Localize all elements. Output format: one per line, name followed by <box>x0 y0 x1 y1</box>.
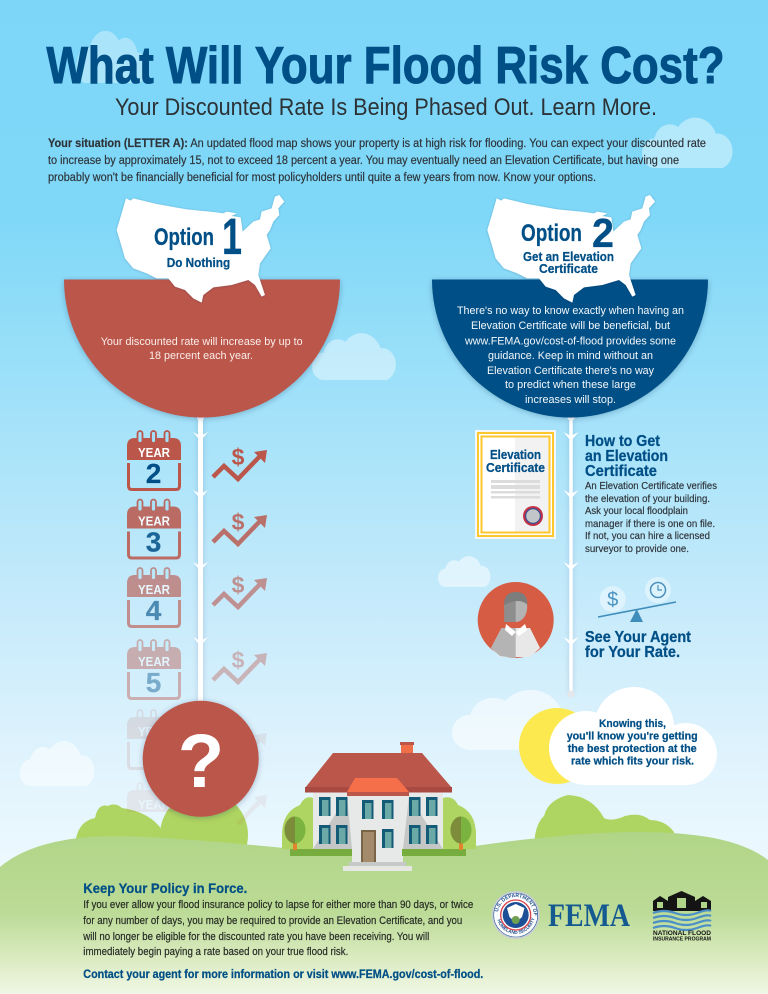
semicircle option 1 <box>64 280 340 418</box>
option 2 label: Certificate <box>539 261 598 276</box>
situation text block: to increase by approximately 15, not to exceed 18 percent a year. You may eventually need an Elevation Certificate, but having one <box>48 155 679 167</box>
year 2 calendar: YEAR <box>138 445 171 460</box>
logo: DHS seal <box>492 891 540 939</box>
callout cloud: Knowing this, <box>599 718 666 730</box>
footer heading: Keep Your Policy in Force. <box>83 880 247 896</box>
cost increase icon year 4 <box>213 572 267 607</box>
situation text block <box>48 138 706 184</box>
how to get text: the elevation of your building. <box>585 493 710 505</box>
how to get text: If not, you can hire a licensed <box>585 530 710 542</box>
year 4 calendar <box>127 568 181 626</box>
cost increase icon year 6 <box>213 733 267 762</box>
cost increase icon year 4: $ <box>232 572 245 598</box>
description option 2: Elevation Certificate will be beneficial, but <box>471 320 670 332</box>
logo: FEMA wordmark: FEMA <box>548 898 630 934</box>
subtitle: Your Discounted Rate Is Being Phased Out. Learn More. <box>115 94 657 121</box>
icon: elevation certificate: Elevation <box>490 447 541 462</box>
timeline arrows 2 <box>564 432 578 646</box>
end dot 2 <box>568 690 574 698</box>
footer text <box>82 899 473 958</box>
side windows <box>319 797 438 844</box>
timeline line 2 <box>569 417 573 694</box>
option 2 label: Get an Elevation <box>523 249 614 264</box>
bushes <box>75 791 674 879</box>
logo: National Flood Insurance Program: NATIONAL FLOOD <box>653 930 711 937</box>
year 6 calendar <box>127 710 181 768</box>
cost increase icon year 3 <box>213 509 267 544</box>
start dot 1 <box>197 413 204 421</box>
description option 2: increases will stop. <box>525 394 616 406</box>
how to get text: manager if there is one on file. <box>585 518 715 530</box>
icon: agent <box>478 582 554 658</box>
option 2 label: 2 <box>592 210 614 256</box>
icon: sun <box>519 708 595 784</box>
year 2 calendar <box>127 431 181 490</box>
how to get heading: an Elevation <box>585 448 668 465</box>
lawn strips <box>290 849 466 856</box>
question circle: ? <box>178 719 224 804</box>
contact line: Contact your agent for more information or visit www.FEMA.gov/cost-of-flood. <box>83 969 483 981</box>
timeline line 1 <box>198 417 203 702</box>
footer text: will no longer be eligible for the discounted rate you have been receiving. You will <box>82 931 429 943</box>
logo: National Flood Insurance Program <box>653 891 711 942</box>
how to get text: surveyor to provide one. <box>585 543 689 555</box>
description option 1 <box>101 336 303 362</box>
cost increase icon year 2: $ <box>232 444 245 470</box>
icon: house <box>282 742 476 871</box>
year 5 calendar: 5 <box>146 667 161 698</box>
panel: option 2 <box>432 195 708 418</box>
background clouds <box>20 31 733 786</box>
map option 1 <box>117 195 284 303</box>
option 1 label: Do Nothing <box>167 255 230 270</box>
year 2 calendar: 2 <box>146 458 161 489</box>
cost increase icon year 2 <box>213 444 267 479</box>
see your agent heading: for Your Rate. <box>585 644 680 661</box>
footer text: for any number of days, you may be required to provide an Elevation Certificate, and you <box>83 915 462 927</box>
option 2 label <box>521 210 614 276</box>
description option 2: to predict when these large <box>505 379 636 391</box>
chimney <box>400 742 414 753</box>
question circle <box>143 701 259 817</box>
semicircle option 2 <box>432 280 708 418</box>
year 4 calendar: 4 <box>146 595 162 626</box>
start dot 2 <box>567 413 575 421</box>
icon: balance scale <box>598 577 676 622</box>
icon: balance scale: $ <box>607 589 618 611</box>
year 3 calendar <box>127 500 181 558</box>
garden bushes <box>282 797 476 849</box>
footer text: If you ever allow your flood insurance policy to lapse for either more than 90 days, or twice <box>83 899 473 911</box>
see your agent heading <box>585 629 692 661</box>
description option 2 <box>457 305 684 406</box>
panel: option 2 timeline <box>564 413 578 698</box>
description option 1: 18 percent each year. <box>149 350 253 362</box>
icon: elevation certificate: Certificate <box>486 460 545 475</box>
logo: National Flood Insurance Program: INSURANCE PROGRAM <box>653 936 711 942</box>
option 1 label <box>154 208 242 270</box>
panel: option 1 timeline <box>127 413 267 824</box>
right tree <box>450 816 472 850</box>
option 1 label: 1 <box>222 208 242 265</box>
option 2 label: Option <box>521 220 582 247</box>
year 6 calendar: YEAR <box>138 724 171 739</box>
logo: DHS seal: U.S. DEPARTMENT OF <box>494 894 538 916</box>
icon: elevation certificate <box>475 430 556 539</box>
situation text block: Your situation (LETTER A): An updated flood map shows your property is at high risk for flooding. You can expect your discounted rate <box>48 138 706 150</box>
year 7 calendar: YEAR <box>138 797 171 812</box>
how to get text <box>585 480 717 555</box>
year 3 calendar: YEAR <box>138 514 171 528</box>
year 5 calendar <box>127 640 181 698</box>
left tree <box>284 816 306 850</box>
cost increase icon year 5 <box>213 647 267 682</box>
walls <box>313 792 443 849</box>
door <box>361 830 376 862</box>
how to get heading: Certificate <box>585 463 657 480</box>
callout cloud: rate which fits your risk. <box>571 756 694 768</box>
year 3 calendar: 3 <box>146 526 161 558</box>
callout cloud <box>549 687 717 785</box>
footer text: immediately begin paying a rate based on your true flood risk. <box>83 946 348 958</box>
description option 1: Your discounted rate will increase by up to <box>101 336 303 348</box>
description option 2: guidance. Keep in mind without an <box>488 350 653 362</box>
steps <box>343 862 412 871</box>
how to get heading: How to Get <box>585 433 660 450</box>
cost increase icon year 3: $ <box>232 509 245 535</box>
green hill <box>0 832 768 994</box>
roof <box>305 753 452 788</box>
year 5 calendar: YEAR <box>138 654 171 669</box>
how to get text: Ask your local floodplain <box>585 505 688 517</box>
year 4 calendar: YEAR <box>138 582 171 597</box>
center block <box>352 796 403 862</box>
callout cloud: the best protection at the <box>568 743 697 755</box>
description option 2: Elevation Certificate there's no way <box>487 365 654 377</box>
option 1 label: Option <box>154 224 214 251</box>
how to get heading <box>585 433 668 480</box>
situation text block: probably won't be financially beneficial for most policyholders until quite a few years from now. Know your options. <box>48 172 596 184</box>
how to get text: An Elevation Certificate verifies <box>585 480 717 492</box>
description option 2: There's no way to know exactly when having an <box>457 305 684 317</box>
timeline arrows 1 <box>193 432 208 646</box>
logo: DHS seal: HOMELAND SECURITY <box>498 917 534 934</box>
callout cloud: you'll know you're getting <box>567 730 698 742</box>
see your agent heading: See Your Agent <box>585 629 692 646</box>
cost increase icon year 5: $ <box>232 647 245 673</box>
panel: option 1 <box>64 195 340 418</box>
description option 2: www.FEMA.gov/cost-of-flood provides some <box>464 336 676 348</box>
center windows <box>362 800 394 848</box>
year 7 calendar <box>127 783 181 812</box>
cost increase icon year 7 <box>238 795 267 824</box>
map option 2 <box>487 195 655 303</box>
